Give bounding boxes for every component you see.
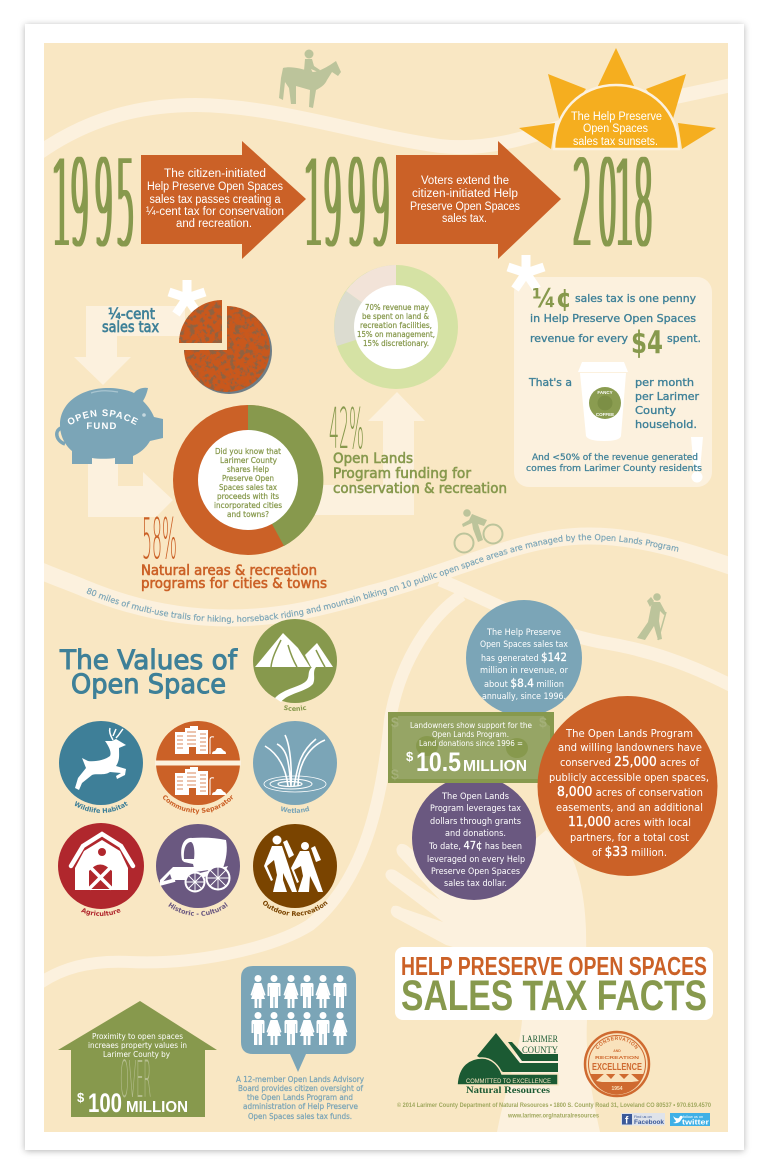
arrow: 1999 — [396, 141, 561, 259]
icon: community separator: Community Separator — [163, 795, 233, 814]
icon: penny with missing quarter — [179, 300, 272, 394]
logo: larimer county natural resources: Natural Resources — [466, 1086, 550, 1096]
icon: agriculture — [58, 823, 144, 916]
chart: 58/42 split donut: Did you know that — [215, 447, 281, 456]
stat: house property values: increaes property values in — [88, 1041, 187, 1050]
callout: advisory board speech bubble: Board provides citizen oversight of — [238, 1084, 363, 1093]
icon: sun with sunset text: sales tax sunsets. — [573, 136, 658, 148]
footer: contact line: www.larimer.org/naturalresources — [507, 1112, 599, 1120]
callout: advisory board speech bubble: the Open Lands Program and — [247, 1093, 353, 1102]
icon: horse and rider — [279, 50, 341, 108]
icon: scenic: Scenic — [284, 705, 306, 711]
arrow: 1995: sales tax passes creating a — [150, 194, 281, 206]
badge: twitter: follow us on — [683, 1115, 703, 1119]
stat: house property values: Larimer County by — [103, 1050, 170, 1059]
chart: 70/15/15 revenue donut: recreation facilities, — [360, 321, 432, 330]
logo: conservation recreation excellence seal: EXCELLENCE — [592, 1061, 642, 1073]
stat circle: orange acres conserved: conserved 25,000 acres of — [560, 755, 699, 770]
flow arrow: fund to split — [88, 455, 173, 517]
stat: house property values: $ — [77, 1090, 85, 1105]
stat circle: orange acres conserved: and willing landowners have — [558, 742, 702, 754]
stat: dollar bill land donations: Landowners show support for the — [410, 721, 532, 730]
stat circle: orange acres conserved: 11,000 acres with local — [568, 815, 691, 830]
stat circle: blue revenue — [466, 600, 582, 716]
panel: quarter cent facts: spent. — [667, 332, 701, 345]
stat: 58 percent — [141, 506, 327, 592]
badge: facebook — [621, 1113, 665, 1126]
icon: piggy bank open space fund: FUND — [86, 421, 118, 432]
heading: the values of open space: Open Space — [71, 669, 226, 700]
icon: coffee cup: COFFEE — [596, 412, 614, 417]
logo: larimer county natural resources — [457, 1033, 558, 1096]
panel: quarter cent facts: household. — [635, 418, 697, 431]
stat: 58 percent: programs for cities & towns — [141, 576, 327, 592]
stat: dollar bill land donations — [388, 712, 554, 783]
heading: the values of open space: The Values of — [59, 645, 238, 676]
panel: quarter cent facts: comes from Larimer County residents — [526, 464, 702, 474]
stat circle: purple leverage: sales tax dollar. — [444, 879, 507, 889]
stat: house property values: 100 — [88, 1088, 122, 1118]
chart: 70/15/15 revenue donut: be spent on land & — [362, 312, 429, 321]
arrow: 1999: sales tax. — [442, 213, 487, 225]
stat circle: orange acres conserved: publicly accessible open spaces, — [549, 772, 709, 784]
panel: quarter cent facts: $4 — [631, 325, 663, 361]
panel: quarter cent facts: revenue for every — [530, 332, 628, 345]
chart: 58/42 split donut: incorporated cities — [214, 501, 282, 510]
icon: cyclist — [454, 509, 502, 552]
stat circle: purple leverage: and donations. — [445, 829, 506, 839]
stat: 42 percent: Program funding for — [333, 466, 471, 482]
flow arrow: tax to fund — [74, 306, 185, 385]
stat: dollar bill land donations: $ — [406, 749, 414, 764]
stat circle: orange acres conserved: easements, and an additional — [556, 802, 703, 814]
label: quarter-cent sales tax — [102, 305, 159, 336]
chart: 70/15/15 revenue donut — [334, 265, 458, 389]
icon: sun with sunset text: The Help Preserve — [571, 111, 662, 123]
stat circle: purple leverage: dollars through grants — [430, 817, 521, 827]
arrow: 1999: Preserve Open Spaces — [410, 201, 520, 213]
icon: sun with sunset text — [519, 48, 716, 149]
chart: 58/42 split donut: shares Help — [227, 465, 269, 474]
icon: wildlife habitat: Wildlife Habitat — [74, 801, 128, 813]
icon: coffee cup — [578, 362, 628, 441]
year 2018: 2018 — [573, 135, 653, 274]
icon: hiker — [637, 593, 666, 640]
logo: conservation recreation excellence seal — [584, 1030, 650, 1098]
chart: 58/42 split donut — [173, 405, 323, 555]
label: quarter-cent sales tax: ¼-cent — [108, 305, 155, 323]
icon: wildlife habitat — [59, 721, 143, 813]
stat circle: purple leverage — [412, 776, 536, 900]
panel: quarter cent facts: in Help Preserve Open Spaces — [530, 312, 696, 325]
arrow: 1995: The citizen-initiated — [164, 168, 266, 180]
stat circle: blue revenue: annually, since 1996. — [482, 692, 566, 702]
stat: 58 percent: Natural areas & recreation — [141, 563, 317, 579]
badge: twitter — [670, 1113, 710, 1126]
icon: piggy bank open space fund: OPEN SPACE — [68, 409, 138, 425]
arrow: 1995: Help Preserve Open Spaces — [147, 181, 283, 193]
stat: dollar bill land donations: $ — [391, 714, 399, 730]
panel: quarter cent facts: per Larimer — [635, 390, 699, 403]
icon: piggy bank open space fund — [55, 388, 163, 464]
panel: quarter cent facts: per month — [635, 376, 694, 389]
title: sales tax facts — [395, 947, 713, 1020]
footer: contact line: © 2014 Larimer County Department of Natural Resources • 1800 S. County Road 31, Loveland CO 80537 • 970.619.4570 — [397, 1101, 711, 1109]
stat circle: purple leverage: The Open Lands — [441, 792, 509, 802]
stat circle: purple leverage: leveraged on every Help — [427, 855, 525, 865]
icon: outdoor recreation: Outdoor Recreation — [263, 900, 328, 916]
stat: house property values: MILLION — [126, 1099, 188, 1116]
stat circle: blue revenue: about $8.4 million — [484, 676, 564, 690]
panel: quarter cent facts: That's a — [528, 376, 572, 389]
stat circle: orange acres conserved: The Open Lands Program — [565, 728, 693, 740]
icon: exclamation mark — [691, 437, 703, 482]
chart: 58/42 split donut: proceeds with its — [217, 492, 279, 501]
icon: asterisk right — [508, 255, 544, 289]
icon: wetland: Wetland — [281, 806, 310, 813]
trail with distance caption: 80 miles of multi-use trails for hiking, horseback riding and mountain biking on 10 public open space areas are managed by the Open Lands Program — [86, 534, 678, 624]
logo: conservation recreation excellence seal: 1954 — [611, 1086, 623, 1092]
logo: conservation recreation excellence seal: AND — [613, 1049, 621, 1053]
chart: 58/42 split donut: Spaces sales tax — [219, 483, 277, 492]
arrow: 1995: and recreation. — [176, 218, 252, 230]
icon: wetland — [253, 721, 337, 813]
panel: quarter cent facts — [508, 255, 712, 487]
stat: 58 percent: 58% — [142, 506, 177, 572]
callout: advisory board speech bubble — [236, 966, 364, 1121]
logo: larimer county natural resources: COMMITTED TO EXCELLENCE — [466, 1078, 552, 1085]
panel: quarter cent facts: sales tax is one penny — [575, 292, 696, 305]
icon: historic cultural: Historic - Cultural — [168, 902, 228, 916]
logo: larimer county natural resources: COUNTY — [522, 1045, 558, 1055]
stat circle: blue revenue: Open Spaces sales tax — [480, 640, 569, 650]
icon: scenic — [253, 619, 337, 711]
stat: house property values: OVER — [120, 1050, 151, 1109]
stat: 42 percent: Open Lands — [333, 451, 413, 467]
chart: 58/42 split donut: Larimer County — [220, 456, 277, 465]
panel: quarter cent facts: And <50% of the revenue generated — [532, 453, 698, 463]
arrow: 1999: Voters extend the — [421, 175, 509, 187]
chart: 70/15/15 revenue donut: 15% on management, — [357, 330, 435, 339]
stat circle: orange acres conserved: 8,000 acres of conservation — [557, 785, 703, 800]
icon: sun with sunset text: Open Spaces — [583, 123, 648, 135]
stat: dollar bill land donations: $ — [539, 766, 547, 782]
logo: larimer county natural resources: LARIMER — [522, 1034, 558, 1044]
icon: outdoor recreation — [253, 824, 337, 916]
stat: house property values: Proximity to open spaces — [92, 1032, 183, 1041]
stat circle: purple leverage: To date, 47¢ has been — [428, 839, 522, 852]
stat: dollar bill land donations: Land donations since 1996 = — [419, 739, 523, 748]
stat circle: blue revenue: has generated $142 — [481, 650, 567, 664]
stat circle: blue revenue: million in revenue, or — [480, 666, 568, 676]
year 1999: 1999 — [304, 135, 390, 274]
chart: 70/15/15 revenue donut: 70% revenue may — [365, 303, 429, 312]
icon: coffee cup: FANCY — [597, 390, 613, 395]
label: quarter-cent sales tax: sales tax — [102, 318, 159, 336]
chart: 58/42 split donut: and towns? — [227, 510, 269, 519]
callout: advisory board speech bubble: Open Spaces sales tax funds. — [248, 1112, 352, 1121]
stat: dollar bill land donations: $ — [391, 766, 399, 782]
footer: contact line — [397, 1101, 711, 1120]
flow arrow: split to open lands — [315, 392, 425, 515]
callout: advisory board speech bubble: administration of Help Preserve — [243, 1102, 358, 1111]
panel: quarter cent facts: ¼¢ — [532, 284, 572, 314]
icon: agriculture: Agriculture — [81, 908, 120, 916]
year 1995: 1995 — [52, 135, 135, 274]
arrow: 1995: ¼-cent tax for conservation — [146, 206, 284, 218]
chart: 70/15/15 revenue donut: 15% discretionary. — [363, 339, 429, 348]
stat: house property values — [58, 1001, 217, 1118]
stat: dollar bill land donations: Open Lands Program. — [432, 730, 509, 739]
stat: dollar bill land donations: 10.5 — [416, 747, 461, 777]
badge: facebook: Facebook — [634, 1119, 664, 1126]
badge: facebook: Find us on — [634, 1115, 652, 1119]
stat circle: purple leverage: Program leverages tax — [430, 804, 522, 814]
stat circle: orange acres conserved — [538, 696, 718, 876]
badge: twitter: twitter — [682, 1120, 709, 1126]
icon: historic cultural — [156, 824, 240, 916]
stat circle: blue revenue: The Help Preserve — [486, 628, 561, 638]
chart: 58/42 split donut: Preserve Open — [222, 474, 274, 483]
callout: advisory board speech bubble: A 12-member Open Lands Advisory — [236, 1075, 364, 1084]
stat: 42 percent: conservation & recreation — [333, 481, 507, 497]
logo: conservation recreation excellence seal: RECREATION — [595, 1055, 640, 1061]
stat: dollar bill land donations: $ — [539, 714, 547, 730]
stat: 42 percent: 42% — [329, 396, 364, 462]
arrow: 1995 — [141, 141, 306, 259]
arrow: 1999: citizen-initiated Help — [412, 188, 518, 200]
icon: asterisk — [169, 280, 205, 314]
stat circle: purple leverage: Preserve Open Spaces — [431, 867, 520, 877]
stat: 42 percent — [329, 396, 507, 497]
stat circle: orange acres conserved: partners, for a total cost — [570, 832, 689, 844]
stat: dollar bill land donations: MILLION — [463, 758, 527, 775]
panel: quarter cent facts: County — [635, 404, 677, 417]
badge: facebook: f — [625, 1116, 629, 1126]
icon: community separator — [155, 721, 241, 814]
logo: conservation recreation excellence seal: CONSERVATION — [596, 1036, 638, 1050]
heading: the values of open space — [59, 645, 238, 700]
stat circle: orange acres conserved: of $33 million. — [592, 845, 667, 860]
